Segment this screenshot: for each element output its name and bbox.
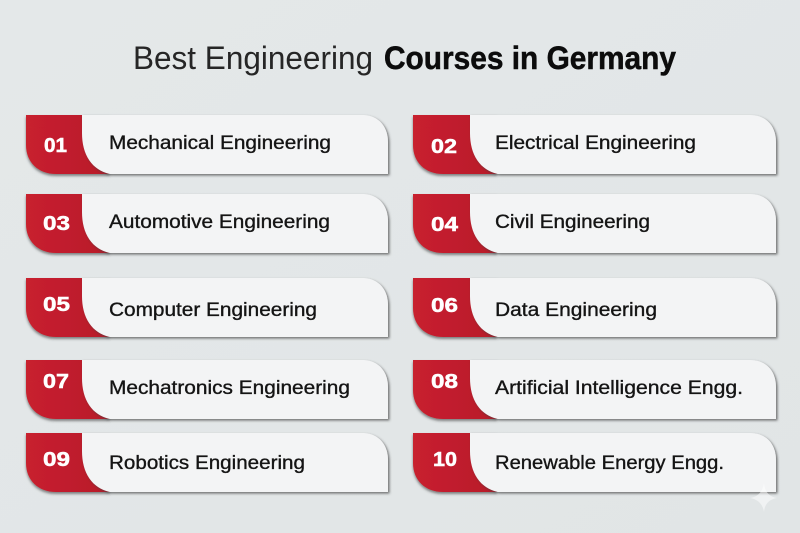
card 10 [413,433,776,492]
card 08: 08 [431,371,458,393]
card 07: Mechatronics Engineering [109,377,350,399]
card 10: 10 [433,449,457,471]
card 03: Automotive Engineering [109,211,330,233]
card 02: Electrical Engineering [495,132,696,154]
card 02 [413,115,776,174]
card 06: Data Engineering [495,299,657,321]
card 01 [26,115,388,174]
card 09: 09 [43,449,70,471]
card 01: Mechanical Engineering [109,132,331,154]
card 06 [413,278,776,337]
icon: sparkle watermark [750,483,777,512]
card 04: Civil Engineering [495,211,650,233]
card 07 [26,360,388,419]
card 04 [413,194,776,253]
card 08 [413,360,776,419]
card 04: 04 [431,214,459,236]
card 03: 03 [43,213,70,235]
card 05: 05 [43,294,70,316]
card 10: Renewable Energy Engg. [495,452,724,474]
title: Best Engineering [133,40,373,76]
card 06: 06 [431,295,458,317]
card 03 [26,194,388,253]
card 05: Computer Engineering [109,299,317,321]
card 01: 01 [44,135,67,157]
card 05 [26,278,388,337]
card 07: 07 [43,371,69,393]
card 02: 02 [431,136,457,158]
card 09: Robotics Engineering [109,452,305,474]
card 09 [26,433,388,492]
card 08: Artificial Intelligence Engg. [495,377,743,399]
title: Courses in Germany [384,40,676,76]
